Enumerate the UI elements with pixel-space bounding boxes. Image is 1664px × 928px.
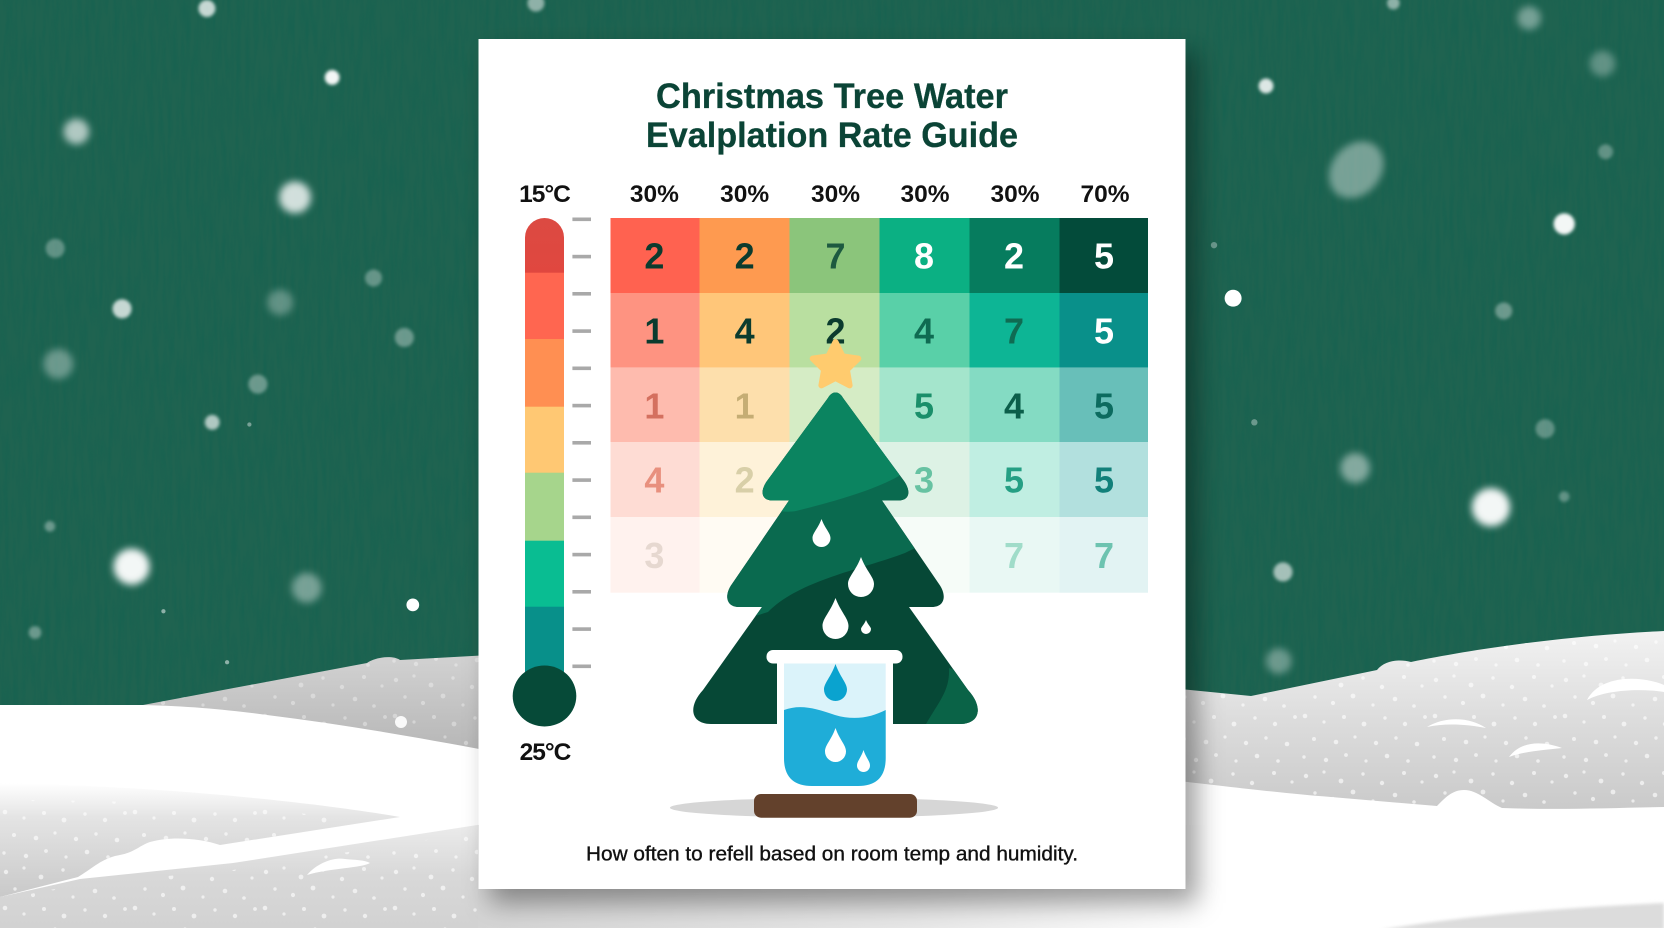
humidity column headers: 30% [990, 181, 1040, 208]
row 2 cells: 4 [735, 310, 755, 352]
row 4 cells: 4 [644, 460, 664, 500]
snow: grey dotted drift bottom left [0, 783, 1208, 928]
row 4 cells: 5 [1004, 460, 1024, 500]
snow: grey drift bottom right [1380, 903, 1664, 928]
row 2 cells: 1 [644, 310, 664, 352]
label: 15 degrees: 15°C [519, 181, 571, 208]
humidity column headers [630, 181, 1130, 208]
water beaker [766, 650, 902, 793]
row 3 cells: 1 [735, 386, 755, 426]
snow: white foreground drifts [0, 705, 1664, 928]
row 5 cells [610, 517, 1148, 593]
christmas tree illustration [693, 392, 978, 724]
water drops falling from tree [812, 519, 874, 639]
thermometer tick marks [572, 218, 591, 668]
row 1 cells [610, 218, 1148, 293]
icon: gold star tree topper [813, 342, 858, 385]
heatmap grid [610, 218, 1148, 593]
label: 25 degrees: 25°C [520, 739, 572, 766]
humidity column headers: 30% [900, 181, 950, 208]
background: fabric texture [0, 0, 1664, 720]
row 4 cells: 2 [735, 460, 755, 500]
row 2 cells: 2 [825, 310, 846, 352]
row 1 cells: 2 [1004, 236, 1024, 276]
row 1 cells: 2 [644, 236, 664, 276]
thermometer scale [513, 218, 576, 726]
row 4 cells [610, 442, 1148, 517]
panel: white guide card [478, 39, 1186, 889]
row 5 cells: 7 [1094, 535, 1114, 576]
row 1 cells: 8 [914, 236, 934, 276]
title: Christmas Tree Water [656, 77, 1008, 116]
row 3 cells: 5 [914, 386, 934, 426]
row 1 cells: 5 [1094, 236, 1114, 276]
row 2 cells: 5 [1094, 310, 1114, 352]
row 2 cells [610, 293, 1148, 368]
row 2 cells: 4 [914, 310, 934, 352]
card drop shadow [490, 53, 1197, 903]
row 5 cells: 3 [644, 535, 664, 576]
row 1 cells: 7 [825, 236, 846, 276]
humidity column headers: 30% [630, 181, 679, 208]
row 4 cells: 5 [1094, 460, 1114, 500]
humidity column headers: 70% [1080, 181, 1130, 208]
icon: white drops in water [825, 728, 870, 772]
row 2 cells: 7 [1004, 310, 1024, 352]
row 4 cells: 3 [914, 460, 934, 500]
row 1 cells: 2 [735, 236, 755, 276]
title [646, 77, 1018, 155]
icon: blue drop in beaker [824, 664, 847, 701]
row 3 cells: 5 [1094, 386, 1114, 426]
humidity column headers: 30% [720, 181, 769, 208]
snow: back hill right [1170, 631, 1664, 830]
row 3 cells: 4 [1004, 386, 1024, 426]
thermometer bulb [513, 666, 576, 726]
humidity column headers: 30% [811, 181, 860, 208]
caption: How often to refell based on room temp and humidity. [586, 844, 1078, 866]
row 5 cells: 7 [1004, 535, 1024, 576]
ground shadow ellipse [670, 798, 998, 818]
falling snowflakes [29, 0, 1615, 674]
snow: back hill left [143, 655, 490, 760]
row 3 cells [610, 368, 1148, 442]
title: Evalplation Rate Guide [646, 116, 1018, 155]
row 3 cells: 1 [644, 386, 664, 426]
brown wooden base [754, 794, 917, 818]
